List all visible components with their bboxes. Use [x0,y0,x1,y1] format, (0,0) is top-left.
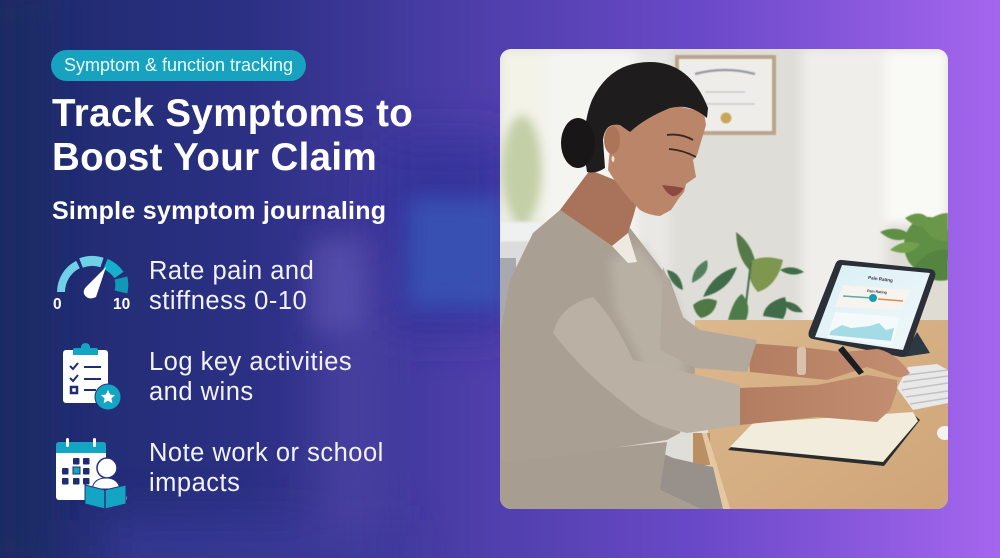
title: Boost Your Claim [52,136,377,179]
brow and eye [667,135,696,157]
icon: pain gauge [53,256,130,313]
watch [797,347,806,375]
earring [612,156,614,162]
face [608,100,706,216]
keyboard [897,364,948,410]
text: rate pain [149,257,314,315]
ear [604,126,620,154]
lips [662,185,684,196]
window left [500,49,668,274]
icon: clipboard checklist with star [63,343,120,410]
photo: woman journaling at desk [500,49,948,509]
tablet: Pain Rating [868,275,893,283]
badge: symptom and function tracking [51,50,306,81]
title: Track Symptoms to [52,92,413,135]
text: work or school impacts [149,439,384,497]
front arm and hand [740,375,897,425]
pot right [918,278,948,330]
gap below desk [706,430,708,433]
chair back [500,258,516,334]
back arm and hand [748,343,910,380]
certificate [675,55,776,135]
undershirt [612,233,637,263]
text: log activities: Log key activities [149,348,352,376]
desk [693,320,948,509]
neck [560,170,640,246]
tablet [808,260,935,357]
mouse [937,426,948,440]
text: log activities: and wins [149,378,254,406]
text: rate pain: Rate pain and [149,257,314,285]
subtitle: Simple symptom journaling [52,197,386,225]
back sleeve [660,267,757,372]
text: log activities [149,348,352,406]
curtains right [802,49,948,324]
icon: calendar with reader [56,438,127,508]
chest highlight [610,242,686,372]
badge: symptom and function tracking: Symptom & function tracking [64,55,293,75]
hair [584,62,708,172]
plant right [880,213,952,281]
front sleeve [553,297,742,433]
title [52,92,413,179]
hair bun [561,118,586,168]
text: rate pain: stiffness 0-10 [149,287,307,315]
notebook [728,414,920,466]
plant behind [667,232,804,320]
icon: pain gauge: 10 [113,296,130,313]
tablet: Pain Rating [867,289,887,295]
far leg [660,454,723,509]
text: work or school impacts: impacts [149,469,240,497]
torso sweater [500,210,695,462]
icon: pain gauge: 0 [53,296,62,313]
wall [500,49,948,509]
near thigh [500,442,700,509]
text: work or school impacts: Note work or school [149,439,384,467]
pen [838,346,864,375]
desk leg [693,433,710,465]
